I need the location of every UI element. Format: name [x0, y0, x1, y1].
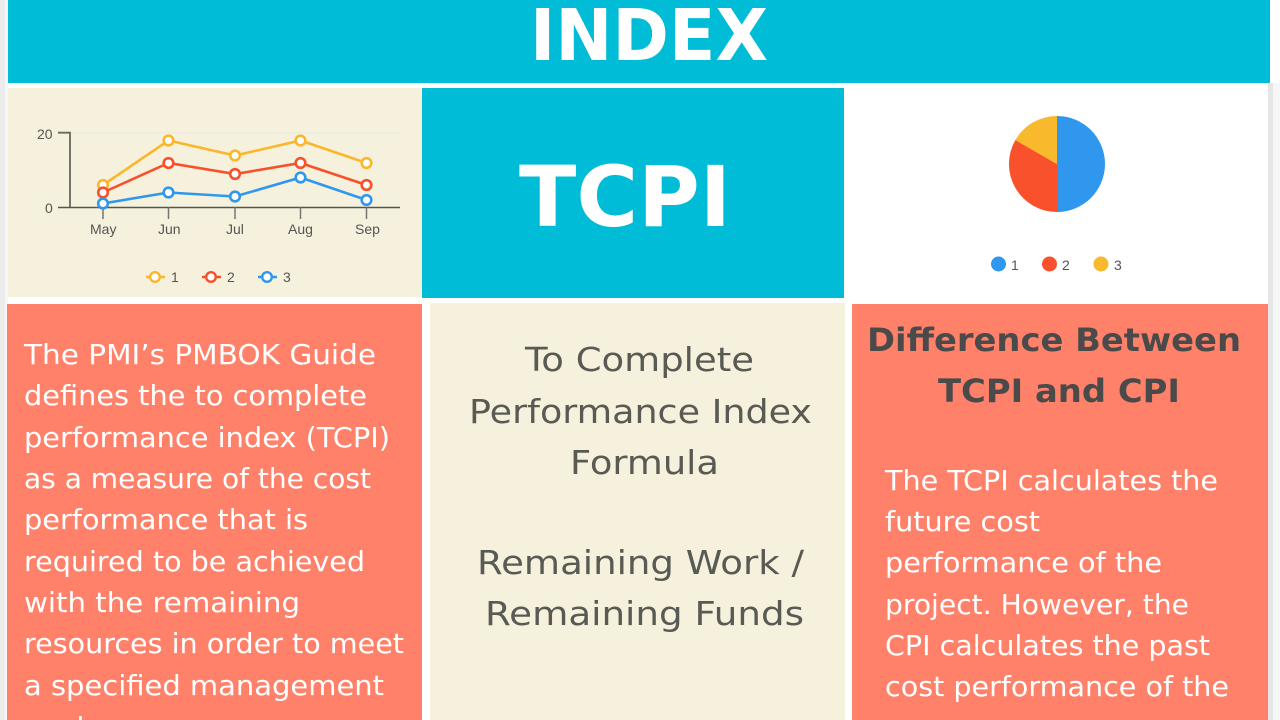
difference text: cost performance of the	[885, 671, 1229, 703]
axis labels: May	[90, 221, 116, 237]
definition text: as a measure of the cost	[24, 463, 371, 495]
difference text: project. However, the	[885, 589, 1189, 621]
axis labels: Sep	[355, 221, 380, 237]
panel: formula	[430, 303, 845, 720]
difference text: future cost	[885, 506, 1040, 538]
definition text: defines the to complete	[24, 380, 367, 412]
definition text: performance index (TCPI)	[24, 422, 390, 454]
panel: pie chart	[991, 116, 1122, 273]
difference heading: TCPI and CPI	[938, 372, 1180, 410]
axis labels: Jul	[226, 221, 244, 237]
pie	[1009, 116, 1105, 212]
formula text: Formula	[570, 443, 719, 482]
line chart legend: 3	[283, 269, 291, 285]
series 1 line	[98, 136, 371, 190]
heading: TCPI: TCPI	[519, 148, 731, 246]
formula text: Remaining Work /	[477, 543, 805, 582]
series 3 line	[98, 173, 371, 208]
axis labels: 0	[45, 200, 53, 216]
difference text	[884, 465, 1229, 720]
difference text: CPI calculates the past	[885, 630, 1210, 662]
chart axes	[58, 133, 400, 219]
formula text: Performance Index	[469, 392, 812, 431]
axis labels: Aug	[288, 221, 313, 237]
difference text: The TCPI calculates the	[884, 465, 1218, 497]
panel: TCPI heading	[422, 88, 844, 298]
panel: line chart	[8, 88, 422, 297]
definition text: The PMI’s PMBOK Guide	[23, 339, 376, 371]
formula text	[469, 340, 812, 633]
formula text: Remaining Funds	[485, 594, 804, 633]
pie legend: 3	[1114, 257, 1122, 273]
axis labels: 20	[37, 126, 53, 142]
definition text	[23, 339, 404, 720]
pie legend: 1	[1011, 257, 1019, 273]
line chart legend: 2	[227, 269, 235, 285]
pie legend	[991, 256, 1122, 273]
definition text: performance that is	[24, 504, 308, 536]
panel: title banner	[8, 0, 1270, 83]
definition text: required to be achieved	[24, 546, 365, 578]
line chart legend: 1	[171, 269, 179, 285]
panel: definition	[7, 304, 422, 720]
series 2 line	[98, 158, 371, 197]
axis labels	[37, 126, 380, 237]
panel: difference	[852, 304, 1268, 720]
definition text: a specified management	[24, 670, 384, 702]
difference text: performance of the	[885, 547, 1162, 579]
definition text: resources in order to meet	[24, 628, 404, 660]
definition text: with the remaining	[24, 587, 300, 619]
formula text: To Complete	[524, 340, 754, 379]
difference heading: Difference Between	[867, 321, 1241, 359]
pie legend: 2	[1062, 257, 1070, 273]
axis labels: Jun	[158, 221, 181, 237]
line chart legend	[146, 269, 291, 285]
difference heading	[867, 321, 1241, 410]
